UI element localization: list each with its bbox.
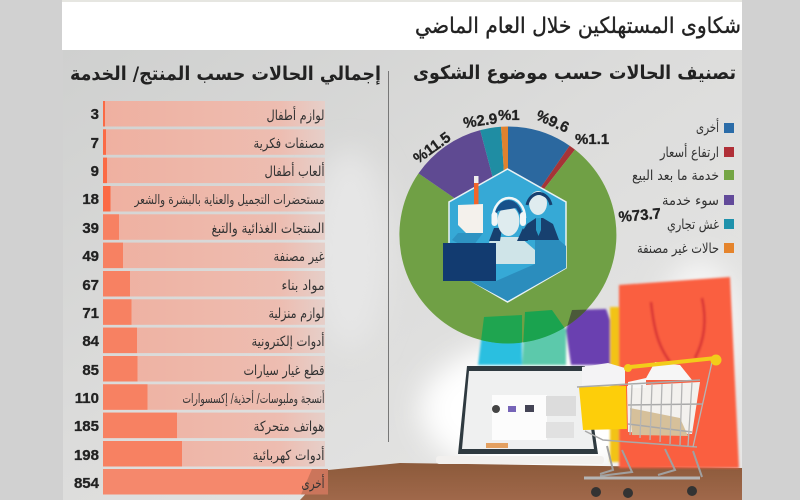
bar labels: مستحضرات التجميل والعناية بالبشرة والشعر (134, 193, 324, 208)
bar values: 18 (82, 191, 99, 208)
pie percentage labels: %9.6 (533, 107, 572, 137)
legend: ارتفاع أسعار (659, 143, 719, 161)
bar labels (134, 106, 325, 492)
bar labels: هواتف متحركة (254, 419, 324, 435)
bar values: 85 (82, 362, 99, 379)
table surface (300, 463, 742, 500)
icon: female agent (489, 198, 535, 264)
bar values: 198 (74, 447, 99, 464)
legend: سوء خدمة (662, 193, 719, 209)
bar values: 7 (91, 135, 99, 152)
legend (632, 118, 734, 257)
shopping bags behind chart (478, 277, 739, 468)
icon: customer support hexagon (443, 169, 566, 302)
bar labels: ألعاب أطفال (264, 162, 325, 180)
icon: pencil (474, 176, 478, 211)
bar values: 854 (74, 475, 100, 492)
icon: male agent (517, 191, 559, 240)
bar chart (74, 101, 328, 494)
legend: حالات غير مصنفة (637, 241, 719, 257)
panel: background (63, 50, 742, 500)
pie percentage labels: %2.9 (462, 110, 498, 132)
bar labels: مواد بناء (282, 278, 324, 294)
bar values: 84 (82, 333, 100, 350)
title: شكاوى المستهلكين خلال العام الماضي (415, 14, 741, 39)
bar labels: لوازم منزلية (268, 306, 324, 322)
bar labels: أنسجة وملبوسات/ أحذية/ إكسسوارات (182, 390, 324, 407)
pie percentage labels (410, 107, 662, 226)
pie percentage labels: %1.1 (575, 131, 609, 148)
title band (62, 0, 742, 50)
icon: document (458, 204, 483, 233)
bar labels: أدوات إلكترونية (252, 332, 325, 350)
bar values: 71 (82, 305, 99, 322)
bar labels: أدوات كهربائية (252, 446, 325, 464)
pie percentage labels: %11.5 (410, 129, 454, 167)
bar values: 67 (82, 277, 99, 294)
pie percentage labels: %73.7 (618, 205, 662, 226)
bar values: 110 (75, 390, 99, 407)
laptop (436, 366, 604, 464)
bar labels: أخرى (302, 474, 325, 492)
icon: monitor (443, 243, 496, 281)
bar values: 185 (74, 418, 99, 435)
bar labels: قطع غيار سيارات (244, 363, 324, 379)
bar labels: غير مصنفة (274, 249, 324, 265)
vertical divider (388, 71, 389, 442)
pie percentage labels: %1 (498, 107, 520, 124)
shopping cart (577, 354, 722, 498)
heading: totals by product: إجمالي الحالات حسب المنتج/ الخدمة (70, 63, 381, 85)
bar labels: مصنفات فكرية (254, 136, 324, 152)
bar labels: لوازم أطفال (266, 106, 324, 124)
bar values (74, 106, 100, 492)
bar values: 9 (91, 163, 99, 180)
legend: أخرى (696, 118, 719, 136)
heading: classification by subject: تصنيف الحالات حسب موضوع الشكوى (413, 62, 736, 84)
legend: غش تجاري (667, 217, 719, 233)
legend: خدمة ما بعد البيع (632, 168, 719, 184)
pie chart (399, 126, 616, 365)
bar values: 39 (82, 220, 99, 237)
bar labels: المنتجات الغذائية والتبغ (212, 221, 324, 237)
bar values: 3 (91, 106, 99, 123)
bar values: 49 (82, 248, 99, 265)
